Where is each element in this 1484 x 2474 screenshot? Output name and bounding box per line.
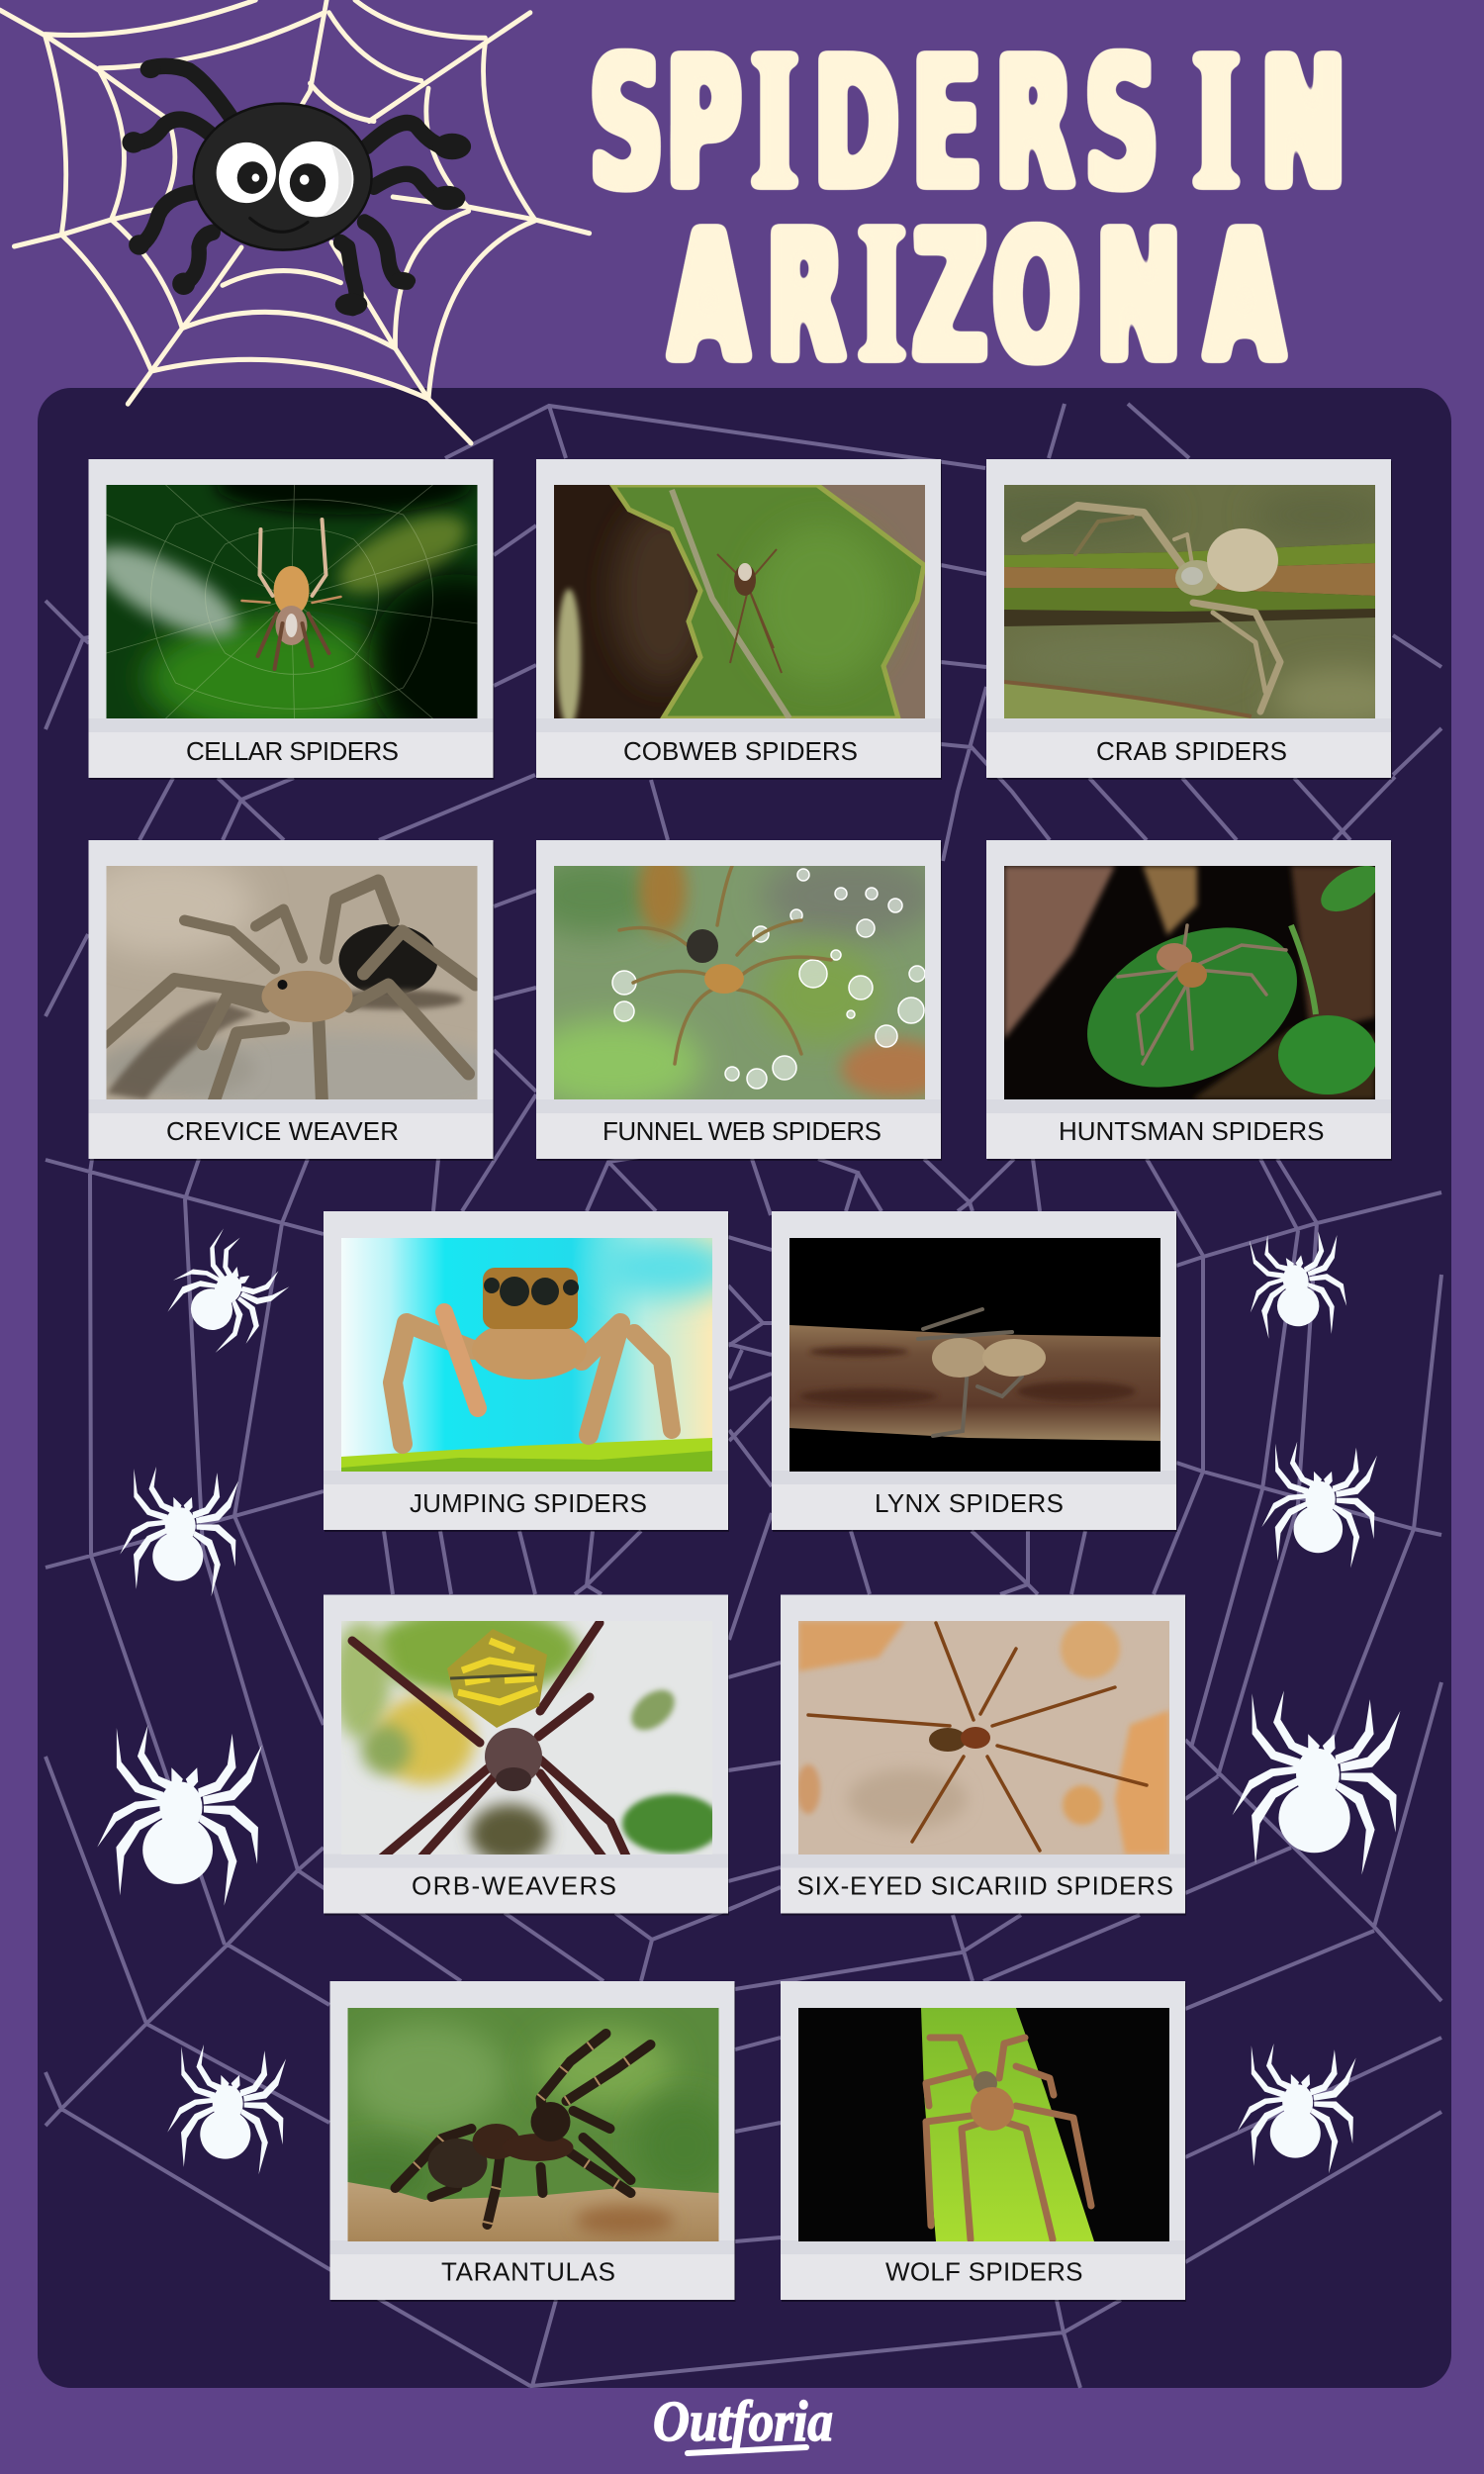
card: cobweb spiders: [536, 459, 942, 780]
photo: funnel web spider with droplets: [554, 866, 925, 1099]
label: HUNTSMAN SPIDERS: [1059, 1116, 1324, 1146]
photo: tarantula on rock: [348, 2008, 718, 2241]
label: CELLAR SPIDERS: [186, 736, 399, 766]
label: COBWEB SPIDERS: [623, 736, 858, 766]
card: six-eyed sicariid spiders: [781, 1595, 1186, 1916]
photo: crevice weaver on stone: [107, 866, 477, 1099]
white spider silhouette 6: [1261, 1442, 1377, 1568]
card: crevice weaver: [77, 840, 512, 1161]
white spider silhouette 7: [1233, 1690, 1400, 1875]
photo: crab spider on twig: [1004, 485, 1375, 718]
card: orb-weavers: [324, 1595, 729, 1916]
card: tarantulas: [319, 1981, 736, 2302]
label: FUNNEL WEB SPIDERS: [603, 1116, 881, 1146]
mascot: cartoon spider: [122, 60, 471, 316]
title: ARIZONA: [669, 189, 1284, 404]
title: SPIDERS IN: [590, 16, 1346, 231]
photo: six-eyed sicariid spider on wall: [798, 1621, 1169, 1855]
label: JUMPING SPIDERS: [410, 1488, 647, 1518]
label: SIX-EYED SICARIID SPIDERS: [797, 1870, 1173, 1900]
photo: lynx spider on branch: [789, 1238, 1160, 1472]
photo: jumping spider: [341, 1238, 712, 1472]
white spider silhouette 4: [167, 2045, 286, 2174]
card: lynx spiders: [772, 1211, 1177, 1532]
panel: dark main panel: [38, 388, 1451, 2388]
label: ORB-WEAVERS: [412, 1870, 616, 1900]
photo: orb-weaver spider: [341, 1621, 712, 1855]
white spider silhouette 2: [120, 1467, 238, 1596]
white spider silhouette 1: [153, 1220, 296, 1366]
logo: Outforia: Outforia: [653, 2389, 833, 2453]
white spider silhouette 5: [1238, 1223, 1353, 1347]
spider web background lines: [46, 404, 1441, 2388]
photo: cellar spider on web: [107, 485, 477, 718]
card: jumping spiders: [324, 1211, 737, 1532]
label: WOLF SPIDERS: [885, 2256, 1082, 2286]
card: wolf spiders: [781, 1981, 1186, 2302]
label: CREVICE WEAVER: [166, 1116, 399, 1146]
card: crab spiders: [955, 459, 1410, 780]
label: CRAB SPIDERS: [1096, 736, 1287, 766]
photo: huntsman spider on leaf: [1004, 866, 1375, 1099]
title: [590, 16, 1346, 404]
photo: wolf spider on green leaf: [798, 2008, 1169, 2241]
white spider silhouette 3: [97, 1725, 262, 1906]
white spider silhouette 8: [1238, 2044, 1356, 2173]
card: huntsman spiders: [986, 840, 1392, 1161]
label: LYNX SPIDERS: [875, 1488, 1064, 1518]
cream corner spider web: [0, 0, 590, 443]
card: funnel web spiders: [524, 840, 950, 1161]
card: cellar spiders: [83, 455, 546, 780]
label: TARANTULAS: [441, 2256, 615, 2286]
photo: cobweb spider on leaf: [554, 485, 925, 718]
